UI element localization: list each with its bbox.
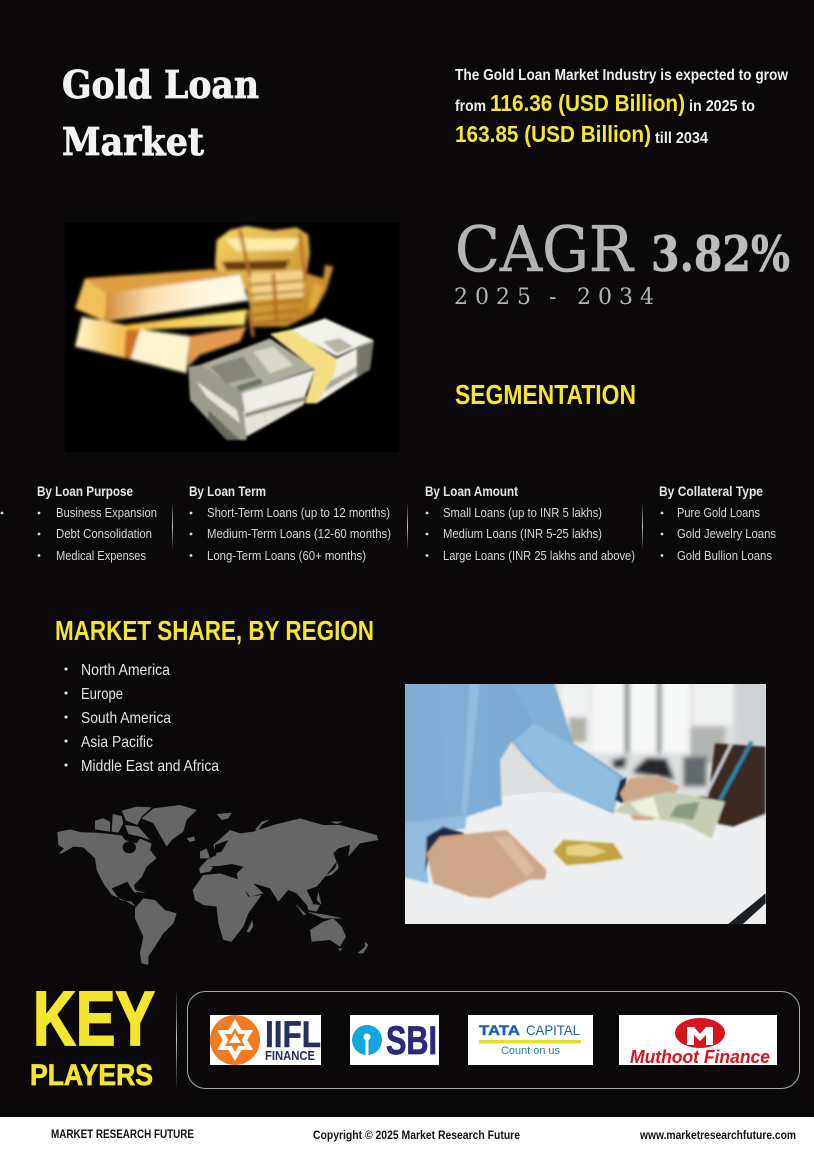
region list: South America [81,710,171,727]
segment column: by loan purpose: Business Expansion [56,505,157,520]
stray bullet [1,512,3,514]
logo: Tata Capital: CAPITAL [526,1022,580,1038]
logo: Tata Capital: Count on us [501,1045,560,1057]
heading: segmentation: SEGMENTATION [455,379,636,410]
title: Gold Loan [62,62,259,107]
segment column: by loan amount: Large Loans (INR 25 lakhs and above) [443,548,635,563]
region list: Europe [81,686,123,703]
region list: Asia Pacific [81,734,153,751]
segment column: by collateral type: Pure Gold Loans [677,505,760,520]
segment column: by collateral type: Gold Bullion Loans [677,548,772,563]
footer [0,1117,814,1150]
segment column: by collateral type [659,483,776,563]
logo: Tata Capital [468,1015,593,1065]
CAGR figure: CAGR [455,213,634,286]
image: gold bars and cash [65,222,399,452]
heading: key players [30,976,155,1092]
market forecast text: 116.36 (USD Billion) [490,90,685,116]
title [62,62,259,164]
CAGR figure: 2025 [454,285,538,310]
segment column: by loan amount: By Loan Amount [425,483,518,499]
region list: North America [81,662,170,679]
footer: MARKET RESEARCH FUTURE [51,1127,194,1141]
world map [57,805,378,965]
segment column: by loan purpose: Medical Expenses [56,548,146,563]
segment column: by loan term: Medium-Term Loans (12-60 months) [207,526,391,541]
segment column: by loan purpose: By Loan Purpose [37,483,133,499]
segment column: by loan amount [425,483,635,563]
cash stack [188,365,247,440]
segment column: by loan amount: Small Loans (up to INR 5 lakhs) [443,505,602,520]
region list: Middle East and Africa [81,758,219,775]
market forecast text: from [455,98,486,115]
CAGR figure: - [549,285,556,310]
logo: IIFL Finance: FINANCE [265,1048,315,1063]
logo: Muthoot Finance: Muthoot Finance [630,1047,770,1067]
gold vessel [215,226,333,327]
logo: IIFL Finance: IIFL [265,1014,321,1055]
heading: market share by region: MARKET SHARE, BY REGION [55,615,374,646]
lower bars [75,317,126,358]
logo: SBI [350,1015,439,1065]
market forecast text: in 2025 to [689,98,755,115]
segment column: by loan purpose [37,483,157,563]
CAGR figure: 2034 [577,285,661,310]
title: Market [62,119,204,164]
market forecast text: till 2034 [655,130,708,147]
segment column: by loan term: Long-Term Loans (60+ months) [207,548,366,563]
logo: Tata Capital: TATA [479,1022,520,1038]
top bar [75,278,107,322]
market forecast text [455,67,788,147]
segment column: by loan term: By Loan Term [189,483,266,499]
segment column: by collateral type: Gold Jewelry Loans [677,526,776,541]
segment column: by loan amount: Medium Loans (INR 5-25 lakhs) [443,526,602,541]
segment column: by loan purpose: Debt Consolidation [56,526,152,541]
heading: key players: KEY [33,976,155,1062]
CAGR figure [454,213,790,310]
panel: key player logos [188,992,800,1088]
segment column: by loan term: Short-Term Loans (up to 12 months) [207,505,390,520]
segment column: by collateral type: By Collateral Type [659,483,763,499]
footer: Copyright © 2025 Market Research Future [313,1128,520,1142]
logo: Muthoot Finance [619,1015,777,1067]
CAGR figure: 3.82% [651,225,790,283]
market forecast text: 163.85 (USD Billion) [455,121,651,147]
segment column: by loan term [189,483,391,563]
region list [64,662,219,775]
logo: IIFL Finance [210,1014,321,1065]
image: customer exchanging gold for cash [402,673,773,927]
logo: SBI: SBI [386,1019,437,1063]
heading: key players: PLAYERS [30,1059,153,1092]
